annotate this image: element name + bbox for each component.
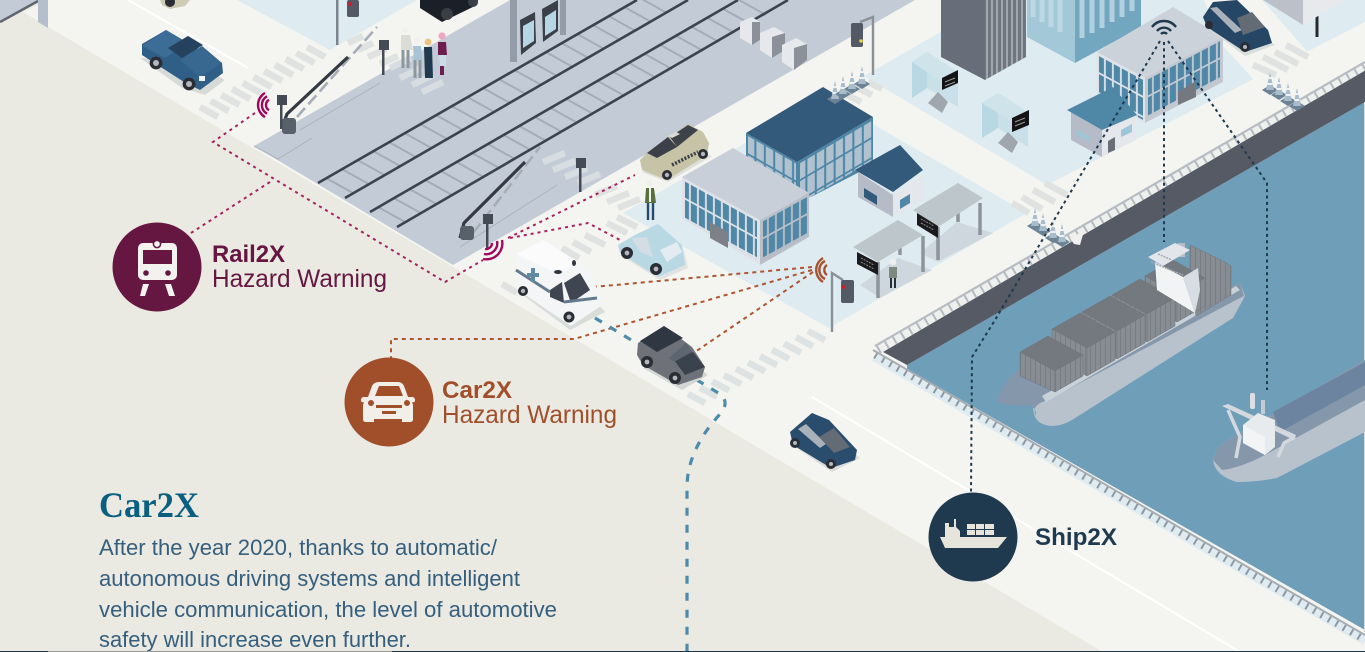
blue dashed vehicle route: [595, 318, 725, 652]
glass shelter one: [912, 52, 958, 113]
lower bus shelter right: [913, 183, 993, 262]
pickup truck: [140, 30, 225, 95]
people waiting at crossing: [401, 27, 447, 78]
callout: ship2x: [928, 492, 1117, 582]
quay notch: [1070, 231, 1084, 245]
rail wave signal left: [258, 93, 269, 117]
upper fence: [875, 62, 1365, 350]
callout: car2x hazard warning: [344, 358, 617, 446]
city block: top left: [237, 0, 417, 50]
rail wave signal right: [483, 240, 502, 259]
signal posts: [277, 40, 586, 248]
structure top left: elevated track end: [0, 0, 48, 28]
railway track sleepers: [326, 0, 766, 222]
person in shelter: [889, 259, 897, 288]
tanker ship: [1213, 360, 1365, 482]
pedestrian near taxi: [645, 180, 656, 220]
body text: After the year 2020, thanks to automatic/: [99, 535, 498, 560]
ambulance: [516, 240, 605, 330]
icon: ship: [928, 492, 1018, 582]
dotted line: car2x hazard warning: [391, 267, 813, 358]
barrier two: [460, 147, 540, 240]
traffic cones group three: [1262, 72, 1305, 111]
house with navy roof: [855, 145, 923, 217]
light blue car: [618, 224, 688, 280]
blue glass tower: [1027, 0, 1141, 63]
building top right: [1263, 0, 1345, 25]
quay wall: [883, 70, 1365, 365]
black car top: [420, 0, 478, 22]
body text: vehicle communication, the level of automotive: [99, 597, 557, 622]
side street upper right: [1204, 0, 1310, 84]
label: rail2x: Rail2X: [212, 241, 285, 268]
text block: car2x description: [99, 485, 557, 652]
label: car2x: Car2X: [442, 377, 512, 404]
icon: car: [344, 358, 434, 446]
water: [907, 102, 1365, 630]
ticket gates: [740, 17, 807, 70]
wifi icon: [1152, 21, 1176, 34]
dark grey car: [637, 326, 708, 390]
body text: [99, 535, 557, 652]
icon: train: [112, 222, 202, 312]
grey office building: [682, 148, 809, 265]
label: hazard warning: Hazard Warning: [212, 265, 387, 293]
car wave signal: [816, 258, 827, 282]
traffic cones group two: [1027, 208, 1070, 247]
callout: rail2x hazard warning: [112, 222, 387, 312]
dark blue car lower: [790, 413, 860, 472]
railway crossing area: [254, 0, 915, 265]
railway tracks: [318, 0, 788, 227]
ticket machines: [510, 0, 566, 62]
city block: upper right: [864, 0, 1365, 185]
container ship: [997, 243, 1245, 426]
tanker bridge and gantry: [1222, 393, 1296, 458]
small house with blue roof: [1067, 87, 1137, 157]
taxi: [640, 124, 712, 182]
heading: Car2X: [99, 485, 199, 525]
city block: central buildings: [623, 97, 1027, 328]
traffic light top right: [851, 17, 873, 75]
label: ship2x: Ship2X: [1035, 524, 1117, 551]
dotted line: rail2x hazard warning: [191, 113, 635, 282]
body text: autonomous driving systems and intelligent: [99, 566, 520, 591]
car at top left: [160, 0, 190, 9]
label: hazard warning: Hazard Warning: [442, 401, 617, 429]
pedestrian crossings: [200, 36, 1308, 403]
raised platform markings: [254, 83, 557, 247]
dark blue car top right: [1203, 0, 1275, 56]
dotted lines: ship2x: [971, 41, 1267, 492]
ship bridge: [1148, 243, 1200, 313]
person top right: [1316, 0, 1318, 37]
traffic light lower: [832, 273, 854, 332]
wifi office building: [1097, 7, 1223, 123]
tall grey building: [941, 0, 1026, 80]
right edge of water: [1364, 102, 1365, 632]
containers: [1020, 245, 1231, 392]
lower fence: [873, 350, 1365, 641]
body text: safety will increase even further.: [99, 627, 411, 652]
navy roofed station: [746, 87, 873, 203]
traffic cones group one: [827, 66, 870, 104]
traffic light top left: [336, 0, 359, 45]
glass shelter two: [982, 93, 1029, 153]
lower bus shelter left: [853, 220, 932, 298]
barrier one: [282, 27, 377, 134]
